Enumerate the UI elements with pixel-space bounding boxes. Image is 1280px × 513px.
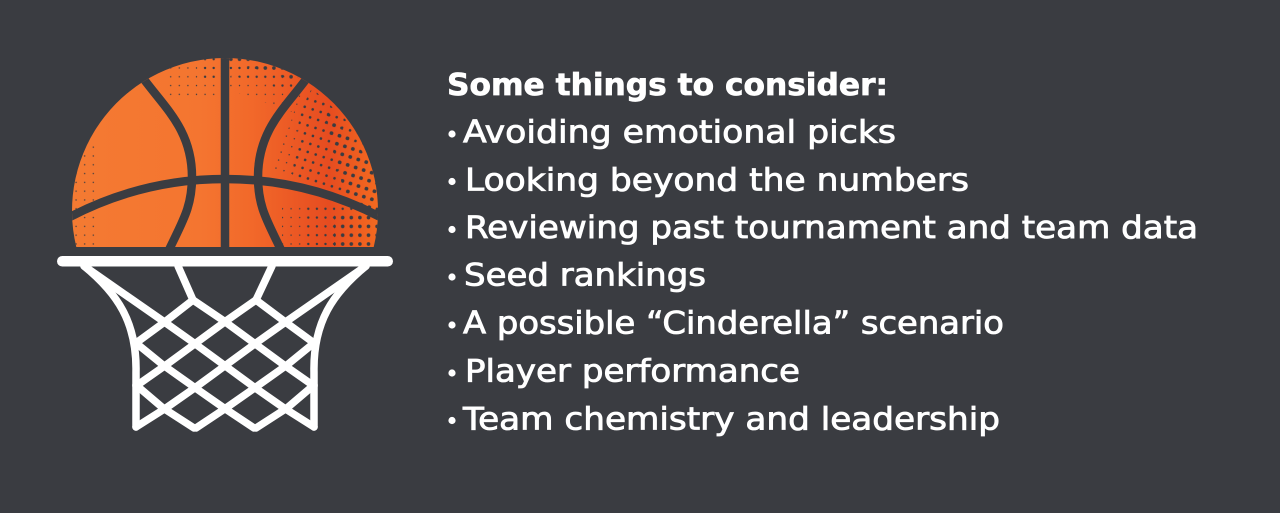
item: beyond the numbers: Looking beyond the numbers — [465, 162, 969, 198]
rim — [57, 256, 393, 266]
item: seed rankings: Seed rankings — [464, 258, 706, 294]
heading: Some things to consider: — [447, 68, 888, 103]
net — [84, 266, 366, 428]
list of considerations — [448, 114, 1198, 438]
seams — [66, 50, 384, 252]
icon: basketball — [66, 50, 384, 252]
item: cinderella: A possible “Cinderella” scenario — [463, 306, 1004, 342]
ball fill — [70, 56, 380, 248]
item: chemistry: Team chemistry and leadership — [462, 402, 1000, 438]
icon: hoop and net — [57, 256, 393, 428]
item: emotional picks: Avoiding emotional picks — [463, 114, 896, 150]
item: player performance: Player performance — [465, 354, 800, 390]
halftone dots — [74, 58, 378, 249]
item: past data: Reviewing past tournament and team data — [465, 210, 1198, 246]
